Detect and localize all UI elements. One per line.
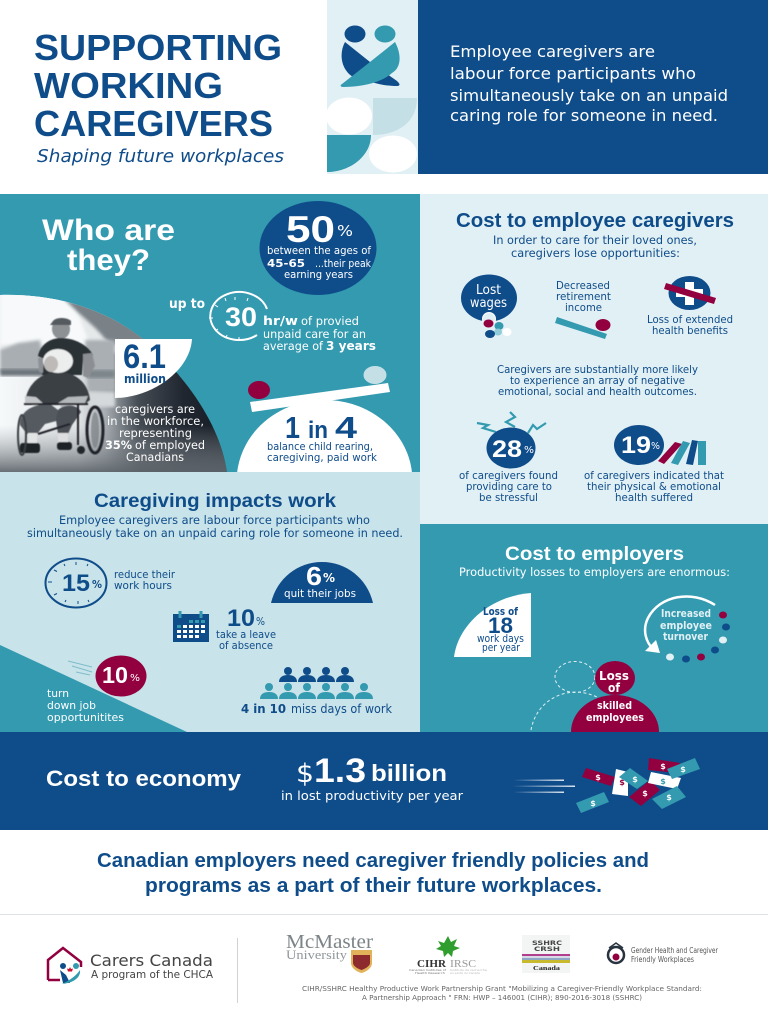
logo: SSHRC CRSH xyxy=(522,935,570,973)
stat: 10 percent leave of absence: 10 xyxy=(227,605,255,632)
stat: loss of skilled employees: employees xyxy=(586,711,644,724)
stat: 19 percent: % xyxy=(651,441,660,452)
figures xyxy=(18,318,103,455)
stat: up to 30 hours: 3 years xyxy=(326,339,376,353)
caption: caregivers in workforce: in the workforce, xyxy=(107,414,204,428)
stat: 10 percent leave of absence xyxy=(173,605,276,652)
shapes xyxy=(326,98,372,134)
stat: 6 percent quit: quit their jobs xyxy=(284,587,356,600)
caption: caregivers in workforce: representing xyxy=(119,426,192,440)
stat: 15 percent reduce hours: % xyxy=(92,578,102,591)
stat: loss of skilled employees: of xyxy=(608,681,621,695)
logo: Carers Canada: Carers Canada xyxy=(90,951,213,970)
header title block xyxy=(34,27,284,167)
stat: 1.3 billion: $ xyxy=(296,759,314,789)
logo: CIHR IRSC xyxy=(409,936,487,975)
decorative header panel with caregiver icon xyxy=(326,0,418,174)
caption: caregivers in workforce xyxy=(105,402,205,464)
logo: Gender Health and Caregiver Friendly Workplaces xyxy=(608,943,719,964)
stat: 4 in 10 miss days: miss days of work xyxy=(291,702,392,716)
logo: CIHR IRSC: en santé du Canada xyxy=(450,971,480,975)
wheelchair xyxy=(87,407,103,453)
item: decreased retirement income xyxy=(555,279,612,339)
stat: 1.3 billion: billion xyxy=(371,760,447,786)
icon: flying money: $ xyxy=(590,799,596,808)
logo: McMaster University xyxy=(286,931,373,973)
stat: 19 percent: their physical & emotional xyxy=(587,480,721,493)
logo: Gender Health and Caregiver Friendly Workplaces: Friendly Workplaces xyxy=(631,955,694,964)
icon: flying money: $ xyxy=(642,789,648,798)
stat: 10 percent turn down jobs xyxy=(47,656,146,724)
person in wheelchair xyxy=(25,372,90,404)
stat: 10 percent turn down jobs: % xyxy=(130,673,140,684)
definition text xyxy=(450,42,728,125)
panel: caregiving impacts work xyxy=(0,472,420,732)
trees xyxy=(64,302,143,346)
photo: caregiver and person in wheelchair xyxy=(0,293,230,473)
item: lost wages: wages xyxy=(470,296,507,311)
text: negative outcomes: emotional, social and health outcomes. xyxy=(498,385,697,398)
logo: CIHR IRSC: Health Research xyxy=(415,971,445,975)
stat: 10 percent leave of absence: take a leave xyxy=(216,628,276,641)
stat: loss of skilled employees xyxy=(530,661,659,732)
logo: SSHRC CRSH: SSHRC xyxy=(532,940,563,947)
stat: 4 in 10 miss days xyxy=(241,667,392,716)
definition text: Employee caregivers are xyxy=(450,42,655,61)
hills and shoreline xyxy=(0,340,45,372)
item: loss of extended health benefits: Loss of extended xyxy=(647,313,733,326)
panel: cost to employers xyxy=(420,524,768,732)
panel: cost to employee caregivers xyxy=(420,194,768,524)
stat: 28 percent: be stressful xyxy=(479,491,538,504)
intro text: Employee caregivers are labour force participants who xyxy=(59,513,370,527)
stat: 28 percent xyxy=(459,412,558,504)
intro text xyxy=(493,233,697,260)
stat: 1 in 4 with balance scale: caregiving, paid work xyxy=(267,451,378,464)
stat: 50 percent xyxy=(260,201,376,295)
caption: caregivers in workforce: 35% xyxy=(105,438,132,452)
item: lost wages: Lost xyxy=(476,283,501,298)
stat: 50 percent: % xyxy=(337,222,353,240)
stat: 50 percent: 50 xyxy=(286,209,335,250)
icon: flying money: $ xyxy=(660,777,666,786)
caption: caregivers in workforce: Canadians xyxy=(126,450,184,464)
text: negative outcomes xyxy=(497,363,698,398)
icon: calendar xyxy=(173,611,209,642)
icon: clock xyxy=(209,292,267,340)
stat: 15 percent reduce hours: 15 xyxy=(62,570,90,597)
stat: 6.1 million xyxy=(115,338,192,398)
heading: Who are xyxy=(42,214,175,247)
stat: 6 percent quit xyxy=(271,561,373,603)
stat: loss of 18 work days: per year xyxy=(482,641,520,654)
caption: caregivers in workforce: caregivers are xyxy=(115,402,195,416)
logo: CIHR IRSC: Canadian Institutes of xyxy=(409,968,447,972)
footer xyxy=(0,914,768,1003)
logo: McMaster University: McMaster xyxy=(286,931,373,953)
call to action: Canadian employers need caregiver friendly policies and xyxy=(97,850,649,872)
logo: McMaster University: University xyxy=(286,948,348,962)
stat: 28 percent: % xyxy=(524,445,534,456)
definition text: simultaneously take on an unpaid xyxy=(450,86,728,105)
stat: 28 percent: of caregivers found xyxy=(459,469,558,482)
stat: 50 percent: between the ages of xyxy=(267,244,372,257)
stat: 28 percent: 28 xyxy=(492,436,522,463)
heading: Caregiving impacts work xyxy=(94,491,336,512)
item: loss of extended health benefits: health benefits xyxy=(652,324,728,337)
logo: SSHRC CRSH: Canada xyxy=(533,965,561,972)
stat: 28 percent: providing care to xyxy=(466,480,552,493)
stat: 10 percent turn down jobs: 10 xyxy=(102,662,128,688)
logo: Gender Health and Caregiver Friendly Workplaces: Gender Health and Caregiver xyxy=(631,946,719,955)
light sky behind the trees xyxy=(0,293,150,353)
stat: increased employee turnover xyxy=(645,596,730,662)
stat: 50 percent: 45-65 xyxy=(267,257,305,270)
item: loss of extended health benefits xyxy=(647,276,733,337)
definition text: caring role for someone in need. xyxy=(450,106,718,125)
logo: CIHR IRSC: IRSC xyxy=(450,959,476,970)
logo: Carers Canada: A program of the CHCA xyxy=(91,968,213,981)
intro text: simultaneously take on an unpaid caring role for someone in need. xyxy=(27,526,403,540)
stat: up to 30 hours: 30 xyxy=(225,302,257,332)
stat: 6.1 million: million xyxy=(124,372,166,386)
stat: 1 in 4 with balance scale xyxy=(237,366,412,473)
stat: 1.3 billion: in lost productivity per year xyxy=(281,789,463,803)
icon: people row xyxy=(260,667,373,699)
subtitle: Shaping future workplaces xyxy=(37,146,284,167)
stat: 1 in 4 with balance scale: 4 xyxy=(335,410,358,445)
stat: 10 percent leave of absence: % xyxy=(256,615,265,628)
stat: loss of 18 work days: work days xyxy=(477,632,524,645)
title: SUPPORTING xyxy=(34,27,282,68)
stat: 15 percent reduce hours xyxy=(46,558,175,608)
title xyxy=(34,27,282,144)
text: negative outcomes: Caregivers are substantially more likely xyxy=(497,363,698,376)
heading: they? xyxy=(67,244,150,277)
header definition panel xyxy=(418,0,768,174)
stat: increased employee turnover: turnover xyxy=(663,630,708,643)
call to action xyxy=(97,850,649,897)
stat: 19 percent: 19 xyxy=(621,432,651,459)
stat: 4 in 10 miss days: 4 in 10 xyxy=(241,702,286,716)
icon: flying money: $ xyxy=(595,773,601,782)
item: decreased retirement income: Decreased xyxy=(556,279,610,292)
stat: up to 30 hours xyxy=(169,292,376,353)
heading: Cost to economy xyxy=(46,766,242,791)
icon: flying money: $ xyxy=(660,762,666,771)
stat: 1.3 billion xyxy=(281,752,463,803)
stat: 1 in 4 with balance scale: in xyxy=(308,417,328,444)
caption: caregivers in workforce: of employed xyxy=(135,438,205,452)
title: CAREGIVERS xyxy=(34,103,273,144)
stat: 10 percent turn down jobs: down job xyxy=(47,699,96,712)
stat: up to 30 hours: average of xyxy=(263,339,324,353)
stat: up to 30 hours: of provied xyxy=(301,314,359,328)
panel: who are they xyxy=(0,194,420,473)
stat: up to 30 hours: up to xyxy=(169,297,205,312)
intro text xyxy=(27,513,403,540)
definition text: labour force participants who xyxy=(450,64,696,83)
stat: up to 30 hours: unpaid care for an xyxy=(263,327,366,341)
caregiver xyxy=(51,324,71,339)
stat: 1 in 4 with balance scale: balance child rearing, xyxy=(267,440,373,453)
intro text: In order to care for their loved ones, xyxy=(493,233,697,247)
icon: two people embracing xyxy=(341,26,400,87)
intro text: caregivers lose opportunities: xyxy=(511,246,680,260)
icon: flying money xyxy=(512,758,700,813)
stat: 10 percent turn down jobs: turn xyxy=(47,687,69,700)
stat: 50 percent: ...their peak xyxy=(315,257,372,270)
logo: CIHR IRSC: Instituts de recherche xyxy=(450,968,487,972)
logo: CIHR IRSC: CIHR xyxy=(417,959,447,970)
stat: increased employee turnover: employee xyxy=(660,619,712,632)
stat: 10 percent leave of absence: of absence xyxy=(219,639,273,652)
grant acknowledgement xyxy=(302,985,702,1002)
heading: Cost to employers xyxy=(505,544,684,565)
item: lost wages xyxy=(461,274,517,338)
stat: 19 percent: of caregivers indicated that xyxy=(584,469,725,482)
stat: 6 percent quit: % xyxy=(323,571,335,585)
stat: 1.3 billion: 1.3 xyxy=(314,752,366,790)
stat: 15 percent reduce hours: reduce their xyxy=(114,568,175,581)
ground xyxy=(0,428,227,472)
stat: 1 in 4 with balance scale: 1 xyxy=(285,410,300,445)
icon: flying money: $ xyxy=(632,775,638,784)
stat: 6.1 million: 6.1 xyxy=(123,338,166,376)
stat: 10 percent turn down jobs: opportunitites xyxy=(47,711,124,724)
icon: flying money: $ xyxy=(619,778,625,787)
logo: SSHRC CRSH: CRSH xyxy=(534,946,560,953)
stat: 15 percent reduce hours: work hours xyxy=(114,579,172,592)
item: decreased retirement income: income xyxy=(565,301,602,314)
stat: loss of 18 work days: 18 xyxy=(488,613,513,638)
arrow: circular xyxy=(645,596,715,653)
stat: loss of skilled employees: Loss xyxy=(599,669,629,683)
panel: cost to economy xyxy=(0,732,768,830)
item: decreased retirement income: retirement xyxy=(556,290,612,303)
call to action: programs as a part of their future workplaces. xyxy=(145,875,602,897)
grant acknowledgement: CIHR/SSHRC Healthy Productive Work Partnership Grant "Mobilizing a Caregiver-Friendly Workplace Standard: xyxy=(302,985,702,993)
heading: Cost to employee caregivers xyxy=(456,210,734,232)
stat: up to 30 hours: hr/w xyxy=(263,314,298,328)
icon: flying money: $ xyxy=(680,765,686,774)
title: WORKING xyxy=(34,65,223,106)
heading xyxy=(42,214,175,277)
stat: 50 percent: earning years xyxy=(284,268,353,281)
stat: loss of 18 work days xyxy=(454,593,531,657)
stat: 19 percent xyxy=(584,425,725,504)
stat: 19 percent: health suffered xyxy=(615,491,693,504)
stat: loss of 18 work days: Loss of xyxy=(483,605,518,618)
stat: loss of skilled employees: skilled xyxy=(597,699,632,712)
stat: 6 percent quit: 6 xyxy=(306,561,322,591)
icon: flying money: $ xyxy=(666,793,672,802)
stat: increased employee turnover: Increased xyxy=(661,607,711,620)
logo: Carers Canada xyxy=(48,948,213,984)
grant acknowledgement: A Partnership Approach " FRN: HWP – 146001 (CIHR); 890-2016-3018 (SSHRC) xyxy=(362,994,642,1002)
text: negative outcomes: to experience an array of negative xyxy=(510,374,685,387)
icon: falling books xyxy=(658,440,706,465)
intro text: Productivity losses to employers are enormous: xyxy=(459,565,730,579)
